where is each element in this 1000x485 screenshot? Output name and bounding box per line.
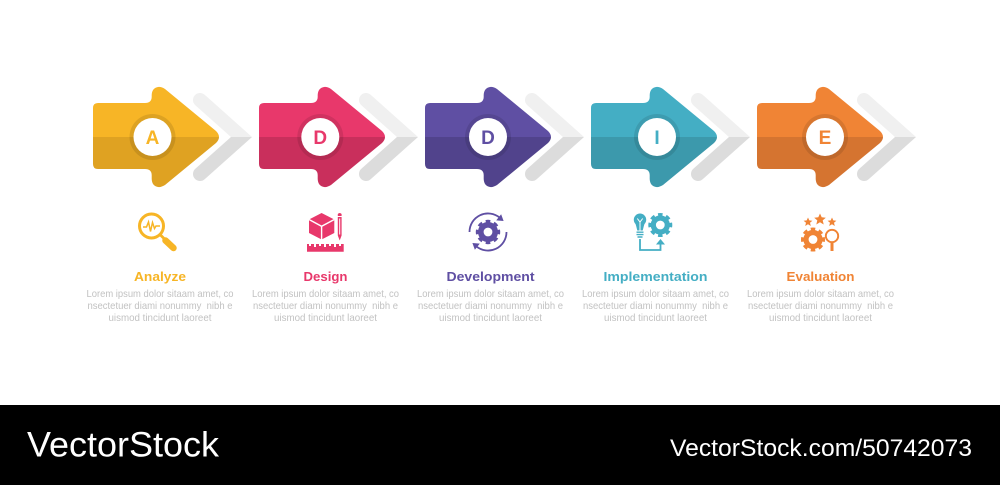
step text: Design: uismod tincidunt laoreet: [274, 313, 377, 324]
step text: Design: nsectetuer diami nonummy nibh e: [253, 301, 398, 312]
step text: Implementation: nsectetuer diami nonummy nibh e: [583, 301, 728, 312]
arrow step: A: A: [146, 128, 160, 149]
arrow step: I: I: [654, 128, 660, 149]
step text: Evaluation: [747, 269, 894, 324]
arrow step: E: E: [819, 128, 831, 149]
icon: cube, pencil and ruler: [307, 213, 344, 252]
step text: Design: [252, 269, 399, 324]
step text: Analyze: uismod tincidunt laoreet: [108, 313, 212, 324]
arrow step: D: D: [481, 128, 495, 149]
step text: Development: uismod tincidunt laoreet: [439, 313, 542, 324]
step text: Implementation: Implementation: [604, 269, 708, 284]
arrow step: D: D: [313, 128, 327, 149]
step text: Development: Development: [446, 269, 535, 284]
step text: Evaluation: Lorem ipsum dolor sitaam amet, co: [747, 289, 894, 300]
step text: Development: [417, 269, 564, 324]
arrow step: I: [591, 87, 740, 187]
icon: bulb, gear and arrow: [634, 214, 671, 250]
step text: Analyze: [86, 269, 234, 324]
step text: Development: Lorem ipsum dolor sitaam amet, co: [417, 289, 564, 300]
step text: Evaluation: nsectetuer diami nonummy nibh e: [748, 301, 893, 312]
footer bar: VectorStock: [27, 426, 220, 464]
step text: Design: Lorem ipsum dolor sitaam amet, co: [252, 289, 399, 300]
icon: magnifier with pulse: [140, 214, 174, 248]
arrow step: D: [259, 87, 408, 187]
icon: stars, gear and magnifier: [802, 214, 838, 251]
step text: Development: nsectetuer diami nonummy nibh e: [418, 301, 563, 312]
step text: Evaluation: Evaluation: [786, 269, 855, 284]
icon: gear in circular arrows: [469, 213, 507, 251]
footer bar: VectorStock.com/50742073: [670, 435, 972, 462]
step text: Analyze: Analyze: [134, 269, 186, 284]
step text: Design: Design: [304, 269, 348, 284]
arrow step: A: [93, 87, 242, 187]
step text: Evaluation: uismod tincidunt laoreet: [769, 313, 872, 324]
footer bar: [0, 405, 1000, 485]
arrow step: E: [757, 87, 906, 187]
step text: Implementation: uismod tincidunt laoreet: [604, 313, 707, 324]
step text: Implementation: Lorem ipsum dolor sitaam amet, co: [582, 289, 729, 300]
arrow step: D: [425, 87, 574, 187]
step text: Analyze: nsectetuer diami nonummy nibh e: [88, 301, 233, 312]
step text: Analyze: Lorem ipsum dolor sitaam amet, co: [86, 289, 234, 300]
step text: Implementation: [582, 269, 729, 324]
